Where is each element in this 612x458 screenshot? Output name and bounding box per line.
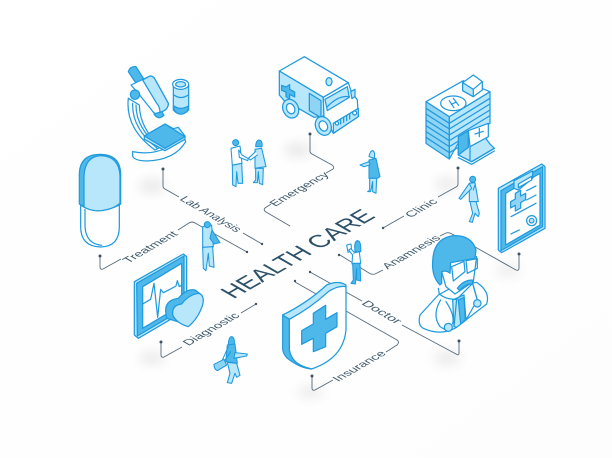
person: woman reading paper [347, 241, 361, 284]
person: man shaking hands [231, 140, 248, 187]
label: treatment: Treatment [121, 230, 182, 265]
person: man with folder [203, 222, 220, 271]
label: lab analysis: Lab Analysis [176, 195, 244, 234]
person: walking with phone [459, 176, 479, 222]
person: walking with briefcase [214, 337, 247, 383]
connector: insurance [294, 280, 398, 390]
icon: microscope and test tube [128, 67, 189, 161]
icon: doctor portrait [419, 236, 488, 332]
connector: doctor [309, 271, 460, 355]
icon: shield with cross [283, 282, 346, 369]
label: anamnesis: Anamnesis [380, 234, 444, 271]
icon: heart monitor [134, 254, 203, 338]
label: insurance: Insurance [330, 349, 389, 384]
label: clinic: Clinic [403, 197, 441, 220]
connector: clinic [382, 166, 460, 229]
connector: lab analysis [162, 168, 263, 245]
label: doctor: Doctor [358, 299, 404, 326]
icon: capsule pill [79, 154, 121, 247]
icon: ambulance [279, 57, 358, 138]
floor shadows [138, 143, 520, 397]
connector: diagnostic [160, 303, 257, 357]
person: woman shaking hands [248, 140, 266, 185]
connector: emergency [264, 132, 334, 226]
label: emergency: Emergency [267, 171, 333, 208]
icon: clipboard [498, 164, 545, 253]
icon: hospital building [426, 75, 494, 164]
connector: anamnesis [338, 233, 520, 274]
person: standing figure [360, 151, 380, 193]
label: diagnostic: Diagnostic [181, 311, 243, 348]
connector: treatment [98, 222, 248, 269]
title: HEALTH CARE [214, 206, 382, 302]
